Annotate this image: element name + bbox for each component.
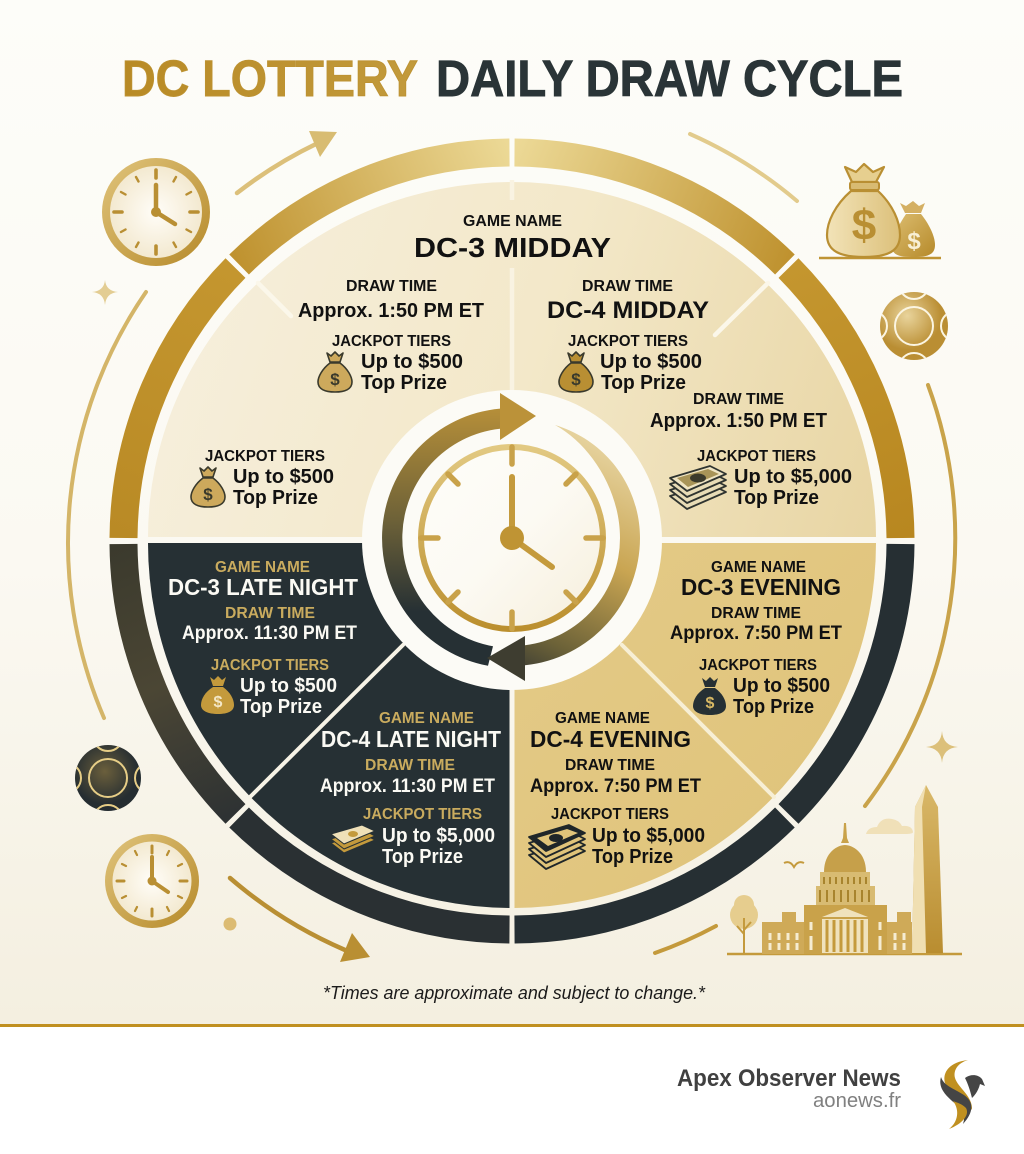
icon: eagle logo xyxy=(940,1060,985,1129)
title xyxy=(122,50,903,107)
panel: DC-4 Evening xyxy=(529,710,705,869)
footer brand name: Apex Observer News xyxy=(677,1065,901,1092)
panel: DC-4 Midday: DC-4 MIDDAY xyxy=(547,297,709,324)
icon: banknote stack xyxy=(529,825,585,869)
footer brand name: aonews.fr xyxy=(813,1090,901,1112)
panel: DC-4 Late Night: Up to $5,000 xyxy=(382,825,495,847)
panel: DC-3 Evening xyxy=(670,559,842,718)
icon: dark lottery ball xyxy=(75,745,141,811)
center hub xyxy=(362,390,662,690)
icon: sparkle left xyxy=(92,280,118,305)
center cycle arrows xyxy=(382,393,640,681)
panel: DC-4 Late Night: Top Prize xyxy=(382,846,463,868)
icon: money bag xyxy=(191,467,225,507)
icon: money bag: $ xyxy=(214,694,223,711)
panel: DC-3 Late Night: Top Prize xyxy=(240,696,322,718)
panel: DC-3 Midday: Up to $500 xyxy=(361,350,463,373)
title: DC LOTTERY xyxy=(122,50,418,107)
icon: dot xyxy=(224,918,236,930)
panel: DC-3 Late Night: DC-3 LATE NIGHT xyxy=(168,574,359,600)
panel: DC-4 Evening: DC-4 EVENING xyxy=(530,726,691,752)
panel: DC-3 Midday: JACKPOT TIERS xyxy=(205,448,325,465)
capitol xyxy=(762,823,912,954)
panel: DC-3 Late Night: Approx. 11:30 PM ET xyxy=(182,623,357,644)
panel: DC-4 Late Night: DRAW TIME xyxy=(365,757,455,774)
wheel panels xyxy=(148,182,876,908)
icon: sparkle right xyxy=(926,731,958,763)
panel: DC-4 Evening: JACKPOT TIERS xyxy=(551,806,669,823)
panel: DC-4 Midday: Top Prize xyxy=(601,371,686,394)
panel: DC-3 Midday xyxy=(191,213,611,509)
panel: DC-4 Late Night: JACKPOT TIERS xyxy=(363,806,482,823)
icon: money bag xyxy=(318,352,352,392)
panel: DC-3 Evening: DC-3 EVENING xyxy=(681,574,841,600)
panel: DC-4 Late Night xyxy=(320,710,502,868)
panel dividers xyxy=(250,180,774,797)
cloud xyxy=(866,819,913,834)
panel: DC-3 Midday: Up to $500 xyxy=(233,465,334,488)
panel: DC-4 Late Night: DC-4 LATE NIGHT xyxy=(321,726,502,752)
panel: DC-4 Late Night: Approx. 11:30 PM ET xyxy=(320,776,495,797)
panel: DC-3 Evening: Approx. 7:50 PM ET xyxy=(670,623,842,644)
panel: DC-4 Late Night: GAME NAME xyxy=(379,710,474,727)
panel: DC-3 Evening: Up to $500 xyxy=(733,675,830,697)
panel: DC-3 Late Night: DRAW TIME xyxy=(225,605,315,622)
icon: money bags top right xyxy=(819,164,941,258)
panel: DC-4 Midday: DRAW TIME xyxy=(582,278,673,295)
panel: DC-4 Midday: JACKPOT TIERS xyxy=(568,333,688,350)
icon: washington skyline xyxy=(727,785,962,954)
outer segmented ring xyxy=(124,152,900,930)
icon: money bag: $ xyxy=(203,485,213,504)
panel: DC-3 Midday: GAME NAME xyxy=(463,213,562,230)
panel: DC-4 Midday: Approx. 1:50 PM ET xyxy=(650,410,827,432)
panel: DC-4 Evening: Up to $5,000 xyxy=(592,825,705,847)
panel: DC-4 Midday: Top Prize xyxy=(734,486,819,509)
panel: DC-3 Late Night xyxy=(168,559,359,718)
panel: DC-4 Midday: DRAW TIME xyxy=(693,391,784,408)
title: DAILY DRAW CYCLE xyxy=(436,50,903,107)
footer band xyxy=(0,1024,1024,1154)
outer decorative arcs and arrows xyxy=(68,131,955,962)
icon: money bag: $ xyxy=(571,370,581,389)
monument xyxy=(912,785,943,953)
footer brand name xyxy=(677,1065,901,1112)
panel: DC-3 Evening: Top Prize xyxy=(733,696,814,718)
panel: DC-4 Evening: DRAW TIME xyxy=(565,757,655,774)
panel: DC-3 Midday: Top Prize xyxy=(233,486,318,509)
footnote: *Times are approximate and subject to change.* xyxy=(323,983,706,1003)
tree xyxy=(730,895,758,953)
icon: money bag xyxy=(201,676,234,714)
panel: DC-4 Midday: Up to $5,000 xyxy=(734,465,852,488)
center clock xyxy=(421,447,603,629)
icon: banknote stack xyxy=(331,825,375,853)
panel: DC-4 Evening: GAME NAME xyxy=(555,710,650,727)
icon: clock top left xyxy=(102,158,210,266)
panel: DC-3 Evening: JACKPOT TIERS xyxy=(699,657,817,674)
panel: DC-3 Midday: Top Prize xyxy=(361,371,447,394)
panel: DC-4 Evening: Top Prize xyxy=(592,846,673,868)
panel: DC-4 Midday: Up to $500 xyxy=(600,350,702,373)
icon: money bag: $ xyxy=(330,370,340,389)
panel: DC-3 Late Night: Up to $500 xyxy=(240,675,337,697)
panel: DC-3 Late Night: GAME NAME xyxy=(215,559,310,576)
panel: DC-3 Late Night: JACKPOT TIERS xyxy=(211,657,329,674)
icon: clock bottom left xyxy=(105,834,199,928)
panel: DC-3 Evening: DRAW TIME xyxy=(711,605,801,622)
panel: DC-4 Evening: Approx. 7:50 PM ET xyxy=(530,776,701,797)
panel: DC-3 Midday: DC-3 MIDDAY xyxy=(414,232,611,263)
icon: money bags top right: $ xyxy=(907,228,921,255)
icon: money bag xyxy=(693,677,726,715)
panel: DC-3 Evening: GAME NAME xyxy=(711,559,806,576)
panel: DC-3 Midday: JACKPOT TIERS xyxy=(332,333,451,350)
bird xyxy=(784,862,804,867)
panel: DC-4 Midday xyxy=(547,278,852,509)
panel: DC-3 Midday: DRAW TIME xyxy=(346,278,437,295)
icon: banknote stack xyxy=(670,466,726,509)
icon: money bags top right: $ xyxy=(852,201,876,250)
icon: money bag xyxy=(559,352,593,392)
icon: gold lottery ball xyxy=(880,292,948,360)
panel: DC-4 Midday: JACKPOT TIERS xyxy=(697,448,816,465)
icon: money bag: $ xyxy=(706,695,715,712)
panel: DC-3 Midday: Approx. 1:50 PM ET xyxy=(298,300,484,322)
